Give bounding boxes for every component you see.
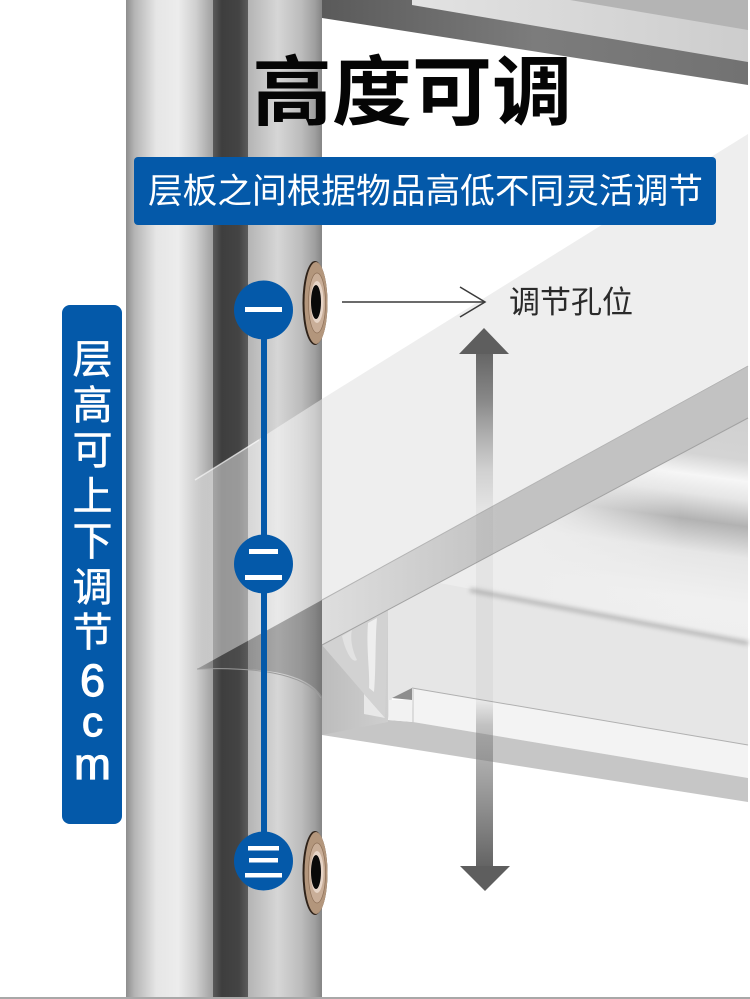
adjustment hole top: [302, 261, 328, 345]
adjustment hole bottom: [302, 831, 328, 915]
vertical pill label: c: [82, 698, 103, 745]
under-shelf panel: [322, 418, 748, 802]
corner bracket: [322, 610, 388, 735]
pointer arrow to hole label: [342, 287, 485, 317]
vertical pill label: 上: [72, 475, 112, 519]
base line: [0, 997, 750, 999]
right upright pipe: [248, 0, 322, 999]
marker one: [234, 280, 293, 340]
left upright pipe: [126, 0, 213, 999]
vertical pill label: [62, 305, 122, 824]
vertical pill label: 6: [80, 655, 105, 706]
title: 高度可调: [252, 50, 572, 136]
translucent shelf over pipes: [195, 134, 748, 698]
vertical pill label: 可: [72, 429, 112, 473]
double-headed height arrow: [459, 328, 510, 891]
upper shelf edge: [322, 0, 748, 85]
vertical pill label: 调: [72, 566, 112, 610]
marker three: [234, 832, 293, 890]
vertical pill label: 层: [72, 338, 112, 382]
subtitle banner: [134, 157, 716, 225]
hole label: 调节孔位: [509, 285, 633, 320]
vertical pill label: 下: [72, 520, 112, 564]
dark gap between pipes: [213, 0, 248, 999]
blue connector line: [261, 310, 267, 861]
vertical pill label: 节: [72, 611, 112, 655]
marker two: [234, 534, 293, 594]
vertical pill label: 高: [72, 384, 112, 428]
lower shelf small step: [389, 688, 748, 745]
subtitle banner: 层板之间根据物品高低不同灵活调节: [148, 172, 703, 211]
vertical pill label: m: [74, 740, 111, 789]
